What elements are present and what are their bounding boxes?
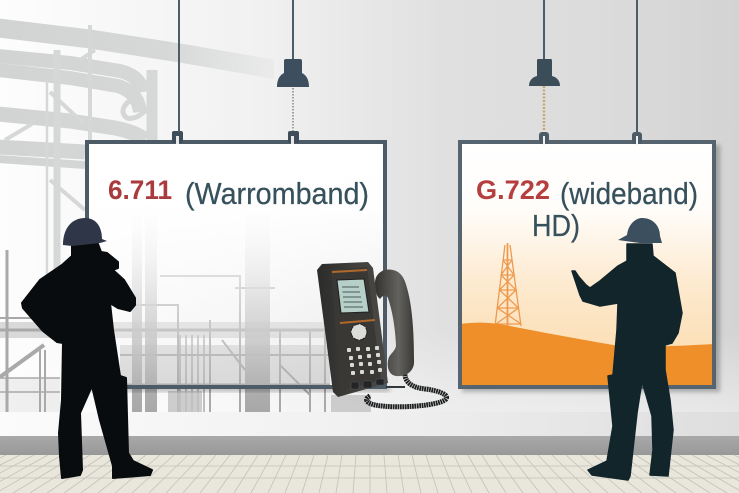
right panel heading: HD) <box>532 208 580 243</box>
right panel shadow <box>462 145 720 392</box>
phone body <box>317 262 388 397</box>
left panel heading: (Warromband) <box>185 176 369 211</box>
right panel pane <box>460 142 714 387</box>
left panel shadow <box>90 386 390 392</box>
right panel clips <box>539 132 642 145</box>
right panel heading <box>476 175 698 243</box>
phone screen <box>337 279 369 313</box>
industrial background <box>0 25 371 412</box>
left worker hard hat <box>63 218 107 246</box>
right panel heading: (wideband) <box>560 176 698 211</box>
right panel frame <box>460 142 714 387</box>
oil derrick <box>495 243 521 326</box>
left panel clips <box>172 131 299 144</box>
phone handset <box>375 270 414 376</box>
left panel heading: 6.711 <box>108 175 172 205</box>
phone dial <box>351 324 367 340</box>
phone keypad <box>347 346 382 375</box>
tiled floor <box>0 455 739 493</box>
phone bottom buttons <box>351 379 384 389</box>
pipes <box>0 28 274 165</box>
phone face <box>331 267 381 391</box>
phone mid strip <box>340 320 375 323</box>
right lamp <box>529 59 560 131</box>
left lamp <box>277 59 309 131</box>
right panel heading: G.722 <box>476 175 550 205</box>
hanging cables <box>179 0 637 132</box>
phone top strip <box>332 270 367 272</box>
left panel pane <box>87 142 385 387</box>
left worker silhouette <box>22 218 152 478</box>
left panel heading <box>108 175 369 211</box>
right worker body <box>572 244 682 480</box>
left worker body <box>22 244 152 478</box>
right worker hard hat <box>618 218 662 243</box>
left panel: narrowband <box>87 131 390 392</box>
telephone <box>317 262 447 407</box>
orange hills <box>460 323 714 387</box>
right panel: wideband <box>460 132 720 392</box>
phone base stem <box>386 386 405 388</box>
phone coiled cord <box>367 372 447 407</box>
phone screen lines <box>342 287 363 307</box>
lower plant mass <box>0 322 330 412</box>
baseboard band <box>0 412 739 436</box>
right worker silhouette <box>572 218 682 480</box>
left panel frame <box>87 142 385 387</box>
lower plant structure <box>0 250 330 412</box>
baseboard skirt <box>0 436 739 455</box>
steel posts and braces <box>5 25 152 330</box>
